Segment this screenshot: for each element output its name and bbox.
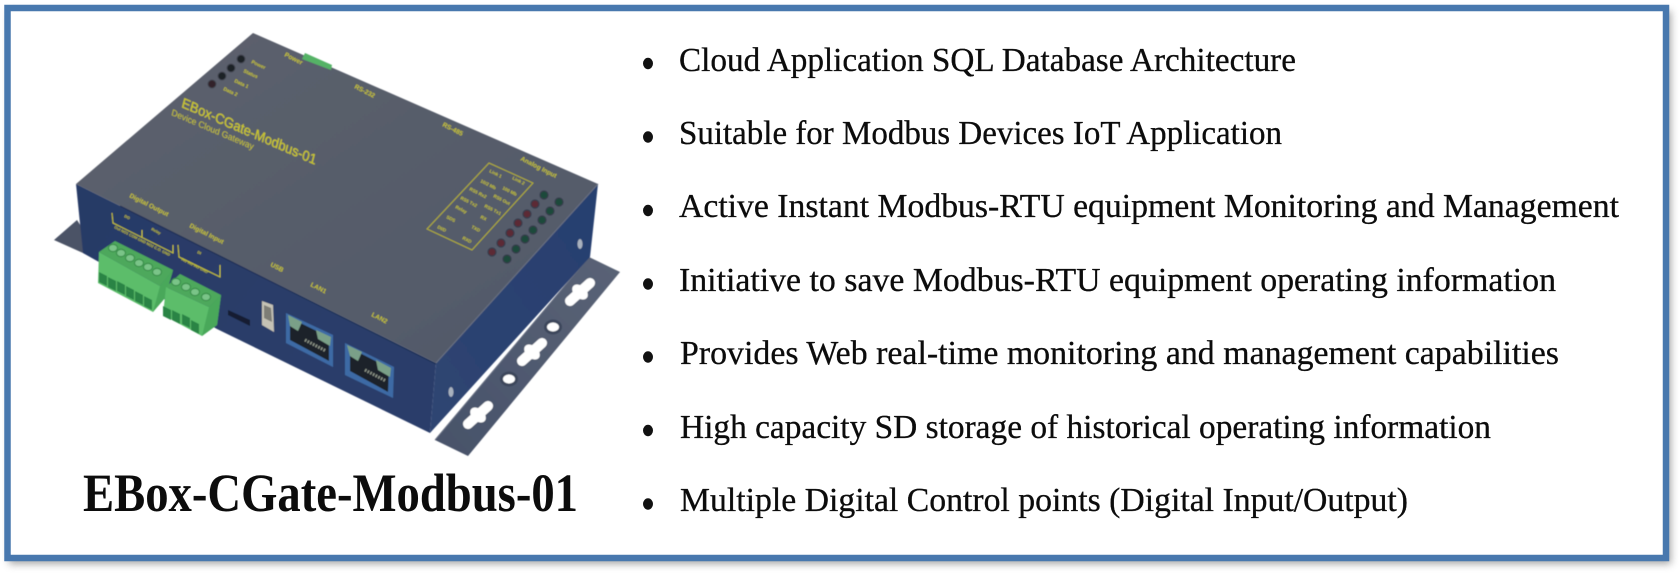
LED label box: TXD	[471, 224, 482, 233]
top left status LEDs	[208, 55, 245, 88]
LED label box: Link 2	[512, 175, 526, 186]
device subtitle printed on lid: Device Cloud Gateway	[171, 107, 255, 152]
port labels on lid: Digital Output	[128, 193, 170, 219]
port labels on lid: LAN2	[370, 312, 389, 326]
green terminal block 1	[98, 241, 173, 312]
LED label box: RS5 Rx2	[469, 186, 488, 200]
terminal captions	[114, 214, 209, 274]
LED captions: Data 1	[233, 78, 249, 90]
USB port	[262, 301, 274, 332]
device photo	[54, 33, 620, 456]
feature: save operating information: Initiative to save Modbus-RTU equipment operating information	[679, 262, 1556, 299]
LED label box: SDS	[446, 214, 456, 223]
right mounting flange	[435, 257, 620, 456]
LED label box: RS5 Tx1	[484, 203, 502, 216]
port labels on lid: LAN1	[309, 282, 328, 296]
LAN1 port	[286, 313, 333, 367]
left mounting flange	[54, 220, 100, 262]
feature: web monitoring: Provides Web real-time monitoring and management capabilities	[680, 335, 1559, 372]
feature: digital control points: Multiple Digital Control points (Digital Input/Output)	[680, 482, 1408, 519]
power connector stub	[302, 53, 332, 70]
feature: modbus IoT: Suitable for Modbus Devices IoT Application	[679, 115, 1282, 152]
LED label box: RX	[480, 214, 488, 222]
LED label box: DI/D	[437, 224, 448, 233]
port labels on lid: Analog Input	[519, 156, 558, 180]
LED label box: 10/2 Mb	[480, 178, 497, 191]
LED captions: Data 2	[222, 86, 238, 98]
LED label box: RS5 Out	[493, 193, 511, 206]
terminal block bracket lines	[112, 213, 220, 277]
terminal captions: IN1 IN2 IN3 GND	[181, 257, 209, 274]
LED array	[488, 191, 563, 263]
feature: cloud application: Cloud Application SQL Database Architecture	[679, 42, 1296, 79]
device name printed on lid: EBox-CGate-Modbus-01	[180, 94, 318, 168]
LED captions: Power	[250, 59, 266, 71]
feature list	[643, 42, 1620, 519]
product name heading: EBox-CGate-Modbus-01	[83, 463, 578, 523]
feature: SD storage: High capacity SD storage of historical operating information	[680, 409, 1491, 446]
LED label box: 100 Mb	[502, 185, 518, 197]
enclosure front face	[76, 184, 436, 433]
enclosure side face	[430, 184, 598, 433]
terminal captions: DI	[197, 250, 202, 256]
LED label box	[427, 163, 533, 250]
LED captions	[222, 59, 266, 98]
LED label box: RS5 Tx2	[460, 195, 478, 208]
port labels on lid: Power	[283, 52, 304, 67]
green terminal block 2	[163, 274, 221, 336]
side screws	[448, 239, 582, 397]
LAN2 port	[345, 343, 394, 398]
port labels on lid: RS-232	[353, 84, 376, 100]
terminal captions: Relay	[151, 227, 162, 236]
port labels on lid: Digital Input	[188, 223, 225, 246]
port labels on lid: RS-485	[441, 122, 464, 138]
terminal captions: Out NO1 COM GND NO2 C.O. GND	[114, 225, 171, 257]
port labels on lid: USB	[269, 262, 285, 274]
LED label box: RXD	[462, 235, 473, 245]
LED label box: Relay	[455, 204, 468, 215]
LED label box: Link 1	[489, 168, 503, 179]
enclosure top face	[76, 33, 598, 363]
micro USB slot	[228, 310, 250, 326]
LED captions: Status	[242, 68, 259, 80]
terminal captions: DO	[124, 214, 130, 220]
port labels on lid	[128, 52, 558, 326]
feature: monitoring and management: Active Instant Modbus-RTU equipment Monitoring and Management	[679, 188, 1620, 225]
